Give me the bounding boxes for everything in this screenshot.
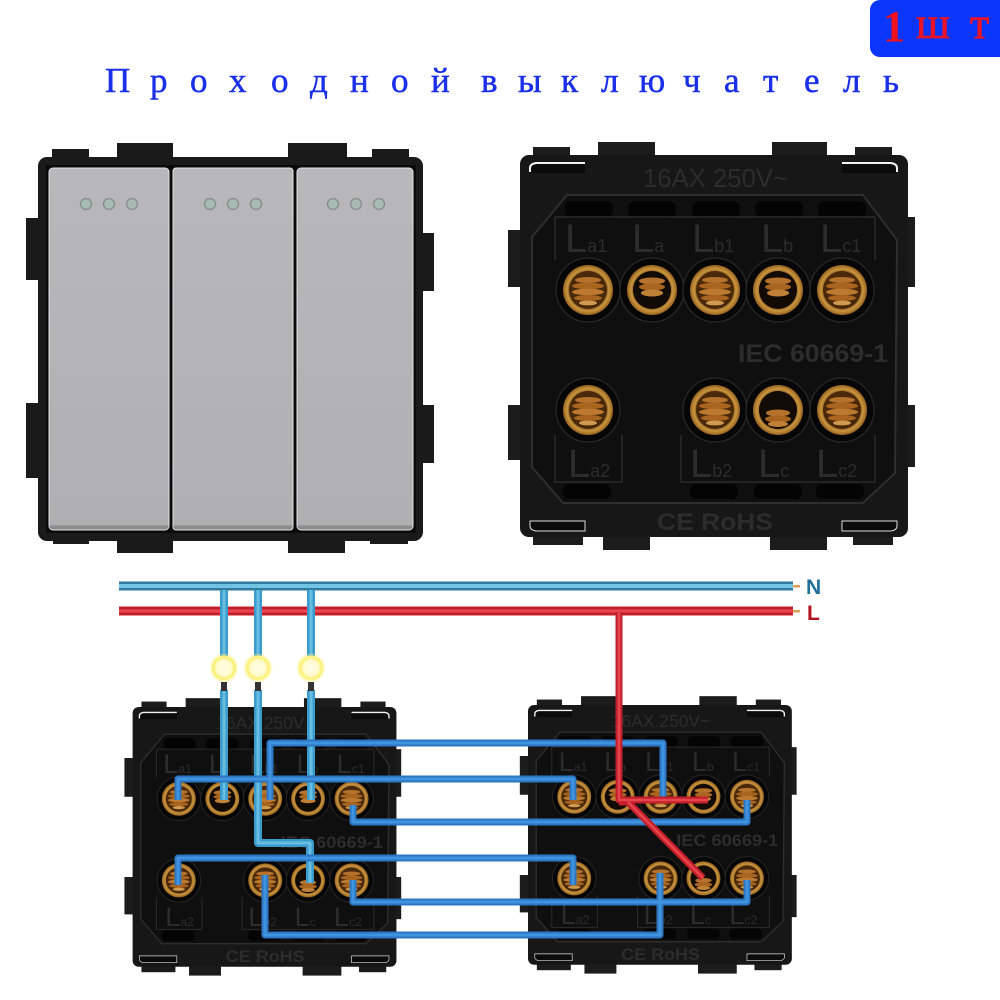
panel: wiring module left: Lc [294,901,316,932]
panel: wiring module left: Lb [296,748,319,779]
embossed markings: CE RoHS [657,509,773,536]
neutral branches to lamps and switch [224,590,311,883]
panel: wiring module left: Lb1 [250,748,278,779]
label L: L [807,602,820,625]
live feed wire [619,612,708,878]
embossed markings: IEC 60669-1 [738,340,888,368]
panel: wiring module left: CE RoHS [226,948,305,966]
icon: lamp 1 [209,653,239,691]
panel: wiring module right: Lc [690,899,711,930]
panel: wiring module left [124,698,401,976]
panel: wiring module left: Lc2 [334,901,362,932]
badge: quantity [870,0,1000,57]
panel: wiring module right: La2 [561,899,590,930]
panel: wiring module left: La2 [165,901,194,932]
traveller wires between switches [178,743,747,935]
title: Проходной выключатель [105,61,899,100]
rocker right [297,168,413,530]
embossed markings: Lc1 [820,217,861,261]
embossed markings: Lb [761,217,793,261]
panel: wiring module right: La [604,746,626,777]
embossed markings: 16AX 250V~ [643,163,788,193]
panel: wiring module left: La [209,748,231,779]
panel: switch back view [508,142,915,550]
embossed markings: Lb2 [690,442,732,486]
panel: wiring module right: Lb [692,746,714,777]
embossed markings: La1 [565,217,607,261]
panel: switch front view [26,143,434,553]
badge: quantity: ш [916,0,950,48]
embossed markings [565,163,888,536]
label N: N [806,576,821,599]
panel: wiring module right: IEC 60669-1 [676,831,778,850]
panel: wiring module right: Lb1 [645,746,674,777]
rocker left [49,168,169,530]
neutral wire N [119,582,793,590]
badge: quantity: т [970,0,989,48]
embossed markings: La [632,217,665,261]
rocker middle [173,168,293,530]
panel: wiring module left: La1 [163,748,192,779]
embossed markings: Lc [758,442,789,486]
embossed markings: Lb1 [692,217,734,261]
switch frame [26,143,434,553]
panel: wiring module right: Lc1 [732,746,760,777]
icon: lamp 2 [243,653,273,691]
embossed markings: Lc2 [816,442,857,486]
embossed markings: La2 [568,442,610,486]
icon: lamp 3 [296,653,326,691]
live wire L [119,606,793,616]
panel: wiring module right: Lb2 [644,899,673,930]
panel: wiring module right: Lc2 [729,899,758,930]
badge: quantity: 1 [883,2,905,51]
panel: wiring module left: 16AX 250V~ [216,713,315,733]
panel: wiring module right: 16AX 250V~ [612,711,710,731]
panel: wiring module right: La1 [559,746,588,777]
panel: wiring module left: IEC 60669-1 [281,833,383,852]
panel: wiring module left: Lb2 [248,901,277,932]
wire tips [793,585,800,612]
indicator lights [80,198,384,210]
panel: wiring module left: Lc1 [337,748,365,779]
panel: wiring module right: CE RoHS [621,946,700,964]
panel: wiring module right [520,696,797,974]
